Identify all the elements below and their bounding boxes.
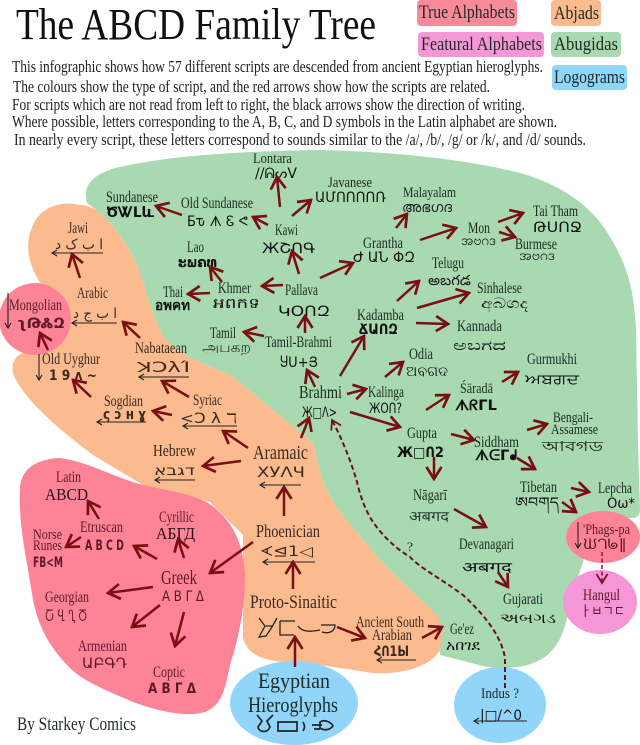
intro text: The colours show the type of script, and the red arrows show how the scripts are related. (13, 77, 490, 96)
script: Arabic (72, 285, 117, 323)
script: Mon: Mon (468, 220, 490, 237)
script: Gurmukhi (524, 351, 580, 388)
script: Latin: Latin (56, 469, 81, 486)
script: Indus (474, 686, 527, 724)
script: Nabataean (135, 340, 190, 377)
script: Coptic: Α Β Γ Δ (148, 681, 196, 697)
script: Pallava: Pallava (285, 282, 318, 299)
script: Gupta (397, 425, 444, 461)
script: Lontara: //ᕱᔕᐯ (255, 166, 297, 182)
script: Syriac: Syriac (193, 392, 222, 409)
script: Siddham (474, 434, 519, 464)
icon: hieroglyph pictographs (257, 715, 333, 732)
script: Gupta: Gupta (407, 425, 437, 442)
script: Mongolian: ʅԹᏜԶ (17, 316, 65, 332)
intro text: For scripts which are not read from left to right, the black arrows show the direction of writing. (12, 95, 525, 114)
script: Proto-Sinaitic (250, 592, 337, 637)
script: Mon (461, 220, 496, 249)
script: Old Uyghur (39, 351, 101, 384)
script: Kannada (453, 318, 506, 354)
script: Cyrillic: Cyrillic (159, 509, 194, 526)
script: Grantha: Ժ ԱՆ ՓԶ (353, 250, 415, 266)
legend: abjads (551, 0, 601, 26)
script: Siddham: ᗑᕮᒥᖱ (475, 448, 517, 464)
legend: true alphabets (417, 0, 517, 26)
script: Ancient South Arabian: Arabian (372, 627, 412, 644)
script: Norse Runes: Norse (33, 527, 62, 543)
credit: By Starkey Comics (17, 714, 136, 735)
script: Hebrew (153, 441, 197, 480)
script: Ge'ez: አበገደ (446, 638, 480, 654)
script: Norse Runes: FB<M (33, 555, 63, 571)
title: The ABCD Family Tree (16, 0, 376, 49)
script: Kalinga: ЖОՈ? (369, 401, 402, 417)
script: Bengali-Assamese: আবগড (541, 439, 604, 455)
script: Etruscan: A B C D (85, 538, 124, 554)
script: Sarada: Śāradā (460, 380, 493, 397)
script: Malayalam (402, 185, 456, 216)
script: Gujarati: Gujarati (503, 591, 543, 608)
script: Proto-Sinaitic: Proto-Sinaitic (250, 592, 337, 613)
script: Latin (45, 469, 88, 504)
script: Tamil-Brahmi: ႸՍ+Յ (280, 355, 318, 371)
script: Aramaic: ХУΛЧ (257, 465, 305, 481)
panel: phags-pa ellipse (566, 511, 640, 563)
script: Gupta: Ж□Ո2 (397, 445, 444, 461)
script: Lepcha (598, 480, 635, 512)
panel: indus ellipse (454, 667, 546, 743)
script: Telugu: అబగడ (428, 273, 471, 289)
script: Tamil-Brahmi (265, 334, 332, 371)
script: Malayalam: Malayalam (403, 185, 456, 201)
script: Bengali-Assamese: Assamese (551, 422, 598, 438)
script: Sundanese: ԾᏔԼև (106, 205, 155, 221)
script: Sinhalese: අබගද (481, 296, 528, 313)
script: Pallava: ԿՕՈԶ (278, 304, 330, 320)
script: Devanagari (459, 536, 514, 576)
script: Gujarati (500, 591, 556, 627)
script: Bengali-Assamese: Bengali- (553, 410, 593, 426)
script: Gurmukhi: Gurmukhi (527, 351, 577, 368)
script: Mongolian (8, 293, 65, 332)
legend: abugidas: Abugidas (554, 34, 618, 55)
script: Sogdian: Sogdian (104, 393, 143, 410)
script: Coptic (148, 664, 196, 697)
script: Lao (178, 239, 217, 271)
script: Khmer (213, 280, 260, 312)
script: Egyptian Hieroglyphs: Hieroglyphs (248, 692, 338, 717)
script: Coptic: Coptic (153, 664, 185, 681)
script: Aramaic: Aramaic (253, 442, 308, 464)
script: Norse Runes (33, 527, 63, 571)
script: Sinhalese (477, 280, 528, 313)
script: Latin: ABCD (45, 485, 88, 504)
dashed arrow: Indus to Brahmi (332, 420, 505, 688)
script: Thai (155, 284, 190, 314)
panel: egyptian hieroglyphs ellipse (230, 661, 358, 745)
script: Indus: |□/^0 (480, 708, 522, 724)
script: Georgian: Ⴀ Ⴁ Ⴂ Ⴃ (45, 609, 87, 625)
script: Tibetan (515, 479, 559, 514)
script: Tai Tham: Tai Tham (533, 203, 578, 220)
script: Phoenician: Phoenician (256, 521, 320, 541)
script: Khmer: Khmer (218, 280, 251, 297)
script: Jawi (52, 220, 103, 253)
script: Nagari: Nāgarī (413, 487, 447, 504)
script: Tamil-Brahmi: Tamil-Brahmi (265, 334, 332, 351)
script: Ge'ez: Ge'ez (450, 621, 474, 638)
panel: abjads region (13, 204, 443, 673)
script: Thai: อพคท (155, 298, 190, 314)
script: Gujarati: અબગડ (500, 611, 556, 627)
script: Syriac: <Ↄ λ ℸ (180, 411, 237, 427)
script: Kawi: ЖՇՈԳ (262, 241, 316, 257)
script: Tibetan: Tibetan (520, 479, 557, 496)
script: Cyrillic (156, 509, 195, 543)
script: Phags-pa: 'Phags-pa (583, 522, 630, 538)
legend: true alphabets: True Alphabets (419, 2, 515, 23)
script: Etruscan: Etruscan (80, 519, 123, 536)
script: Javanese: Javanese (328, 175, 372, 191)
legend: logograms: Logograms (554, 67, 625, 88)
dashed arrow: Phags-pa to Hangul (601, 552, 603, 583)
script: Hebrew: דגבא (154, 463, 195, 479)
script: Ancient South Arabian: ՀՈ1Ы (374, 644, 409, 660)
script: Kannada: ಅಬಗದ (453, 338, 506, 354)
script: Phoenician (256, 521, 320, 562)
script: Kadamba: Kadamba (357, 307, 404, 324)
legend (417, 0, 627, 90)
script: Hangul: ㅏㅂㄱㄷ (580, 601, 625, 621)
script: Burmese (515, 236, 557, 264)
script: Aramaic (253, 442, 308, 485)
script: Armenian (78, 638, 127, 672)
legend: abjads: Abjads (554, 3, 599, 24)
script: Nabataean: ꓘƆλΊ (135, 360, 190, 376)
script: Indus: Indus ? (481, 686, 519, 702)
script: Telugu (428, 255, 471, 289)
script: Pallava (278, 282, 330, 320)
script: Telugu: Telugu (432, 255, 464, 272)
script: Odia: ଅବଗଦ (406, 364, 448, 380)
script: Nagari (409, 487, 450, 525)
script: Norse Runes: Runes (33, 538, 62, 554)
panel: hangul ellipse (563, 570, 637, 634)
script: Lontara (253, 151, 297, 182)
script: Brahmi: Brahmi (299, 382, 342, 402)
script: Kadamba: ՃԱՈԶ (359, 322, 398, 338)
script: Ancient South Arabian: Ancient South (356, 614, 424, 631)
script: Hebrew: Hebrew (153, 441, 197, 460)
script: Odia (406, 346, 448, 380)
script: Nagari: अबगद (409, 509, 450, 525)
panel: true alphabets region (20, 458, 245, 714)
script: Sinhalese: Sinhalese (477, 280, 522, 297)
script: Mongolian: Mongolian (9, 297, 62, 314)
script: Kalinga (368, 384, 404, 417)
script: Syriac (180, 392, 237, 427)
script: Egyptian Hieroglyphs (248, 668, 338, 732)
script: Kawi (262, 222, 316, 257)
script: Sarada (455, 380, 497, 414)
panel: abugidas region (86, 150, 640, 668)
script: Ancient South Arabian (356, 614, 424, 660)
script: Arabic: Arabic (77, 285, 108, 302)
legend: featural alphabets: Featural Alphabets (421, 34, 542, 55)
script: Jawi: ا ب ک د (55, 237, 103, 253)
script: Phoenician: ᗉ⊴1◁ (260, 544, 313, 560)
script: Greek: Greek (161, 567, 197, 589)
script: Sundanese (106, 189, 158, 221)
script: Grantha: Grantha (363, 235, 403, 252)
script: Greek (161, 567, 204, 605)
script: Greek: Α Β Γ Δ (162, 589, 204, 605)
script: Burmese: အဗဂဒ (519, 248, 555, 264)
intro text (12, 57, 586, 149)
script: Georgian (45, 589, 89, 625)
script: Mon: အဗဂဒ (461, 233, 496, 249)
script: Sogdian (97, 393, 146, 423)
script: Javanese: ԱՄՈՈՈՈՌ (315, 190, 386, 206)
script: Old Uyghur: 1 9 ʌ ~ (49, 368, 97, 384)
panel: mongolian circle (0, 283, 71, 355)
script: Kannada: Kannada (457, 318, 502, 335)
script: Hangul: Hangul (583, 587, 620, 604)
script: Khmer: អពកទ (213, 296, 260, 312)
script: Lontara: Lontara (253, 151, 292, 167)
script: Siddham: Siddham (474, 434, 519, 451)
script: Old Sundanese (181, 195, 253, 230)
script: Lao: ະພຄທ (178, 255, 217, 271)
script: Armenian: Armenian (78, 638, 127, 655)
arrows: relationships (40, 177, 589, 667)
script: Burmese: Burmese (515, 236, 557, 253)
script: Nabataean: Nabataean (135, 340, 187, 357)
script: Lao: Lao (187, 239, 204, 256)
script: Hangul (580, 587, 625, 621)
script: Sundanese: Sundanese (106, 189, 158, 206)
script: Thai: Thai (163, 284, 183, 301)
script: Old Uyghur: Old Uyghur (42, 351, 101, 368)
uncertain link question mark: ? (407, 539, 413, 554)
icon: proto-sinaitic pictographs (259, 618, 335, 637)
script: Grantha (353, 235, 415, 266)
script: Georgian: Georgian (45, 589, 89, 606)
script: Arabic: ا ب ج د (73, 306, 117, 322)
script: Old Sundanese: Old Sundanese (181, 195, 253, 212)
script: Odia: Odia (409, 346, 433, 363)
script: Kadamba (357, 307, 404, 338)
script: Tamil: Tamil (210, 325, 236, 342)
script: Malayalam: അഭഗദ (402, 200, 452, 216)
script: Devanagari: अबगद (462, 560, 513, 576)
script: Tamil (202, 325, 251, 356)
script: Kalinga: Kalinga (368, 384, 404, 401)
script: Phags-pa: ᙎᘃᖚ∥ (583, 537, 627, 553)
script: Ge'ez (446, 621, 480, 654)
script: Brahmi (299, 382, 342, 421)
script: Javanese (315, 175, 386, 206)
script: Gurmukhi: ਅਬਗਦ (524, 372, 580, 388)
script: Old Sundanese: Ƃԏ ᗑ Ꮛ ᕙ (187, 214, 248, 230)
script: Kawi: Kawi (275, 222, 298, 239)
script: Jawi: Jawi (68, 220, 88, 237)
script: Tai Tham (533, 203, 582, 236)
script: Egyptian Hieroglyphs: Egyptian (258, 668, 330, 693)
script: Cyrillic: АБГД (156, 524, 195, 543)
script: Lepcha: Oω* (607, 496, 635, 512)
script: Devanagari: Devanagari (459, 536, 514, 553)
script: Armenian: ԱԲԳԴ (82, 656, 127, 672)
script: Tamil: அபகற (202, 340, 251, 356)
script: Sogdian: ς ɔ ʜ ɣ (103, 407, 146, 423)
script: Sarada: ᗑᖇᒥᒪ (455, 398, 497, 414)
script: Etruscan (80, 519, 124, 554)
script: Tibetan: ཨབགད (515, 495, 559, 514)
script: Phags-pa (578, 522, 630, 553)
script: Bengali-Assamese (541, 410, 604, 455)
script: Brahmi: Ж□Λ> (302, 405, 337, 421)
script: Tai Tham: ԹՍՈՋ (533, 220, 582, 236)
